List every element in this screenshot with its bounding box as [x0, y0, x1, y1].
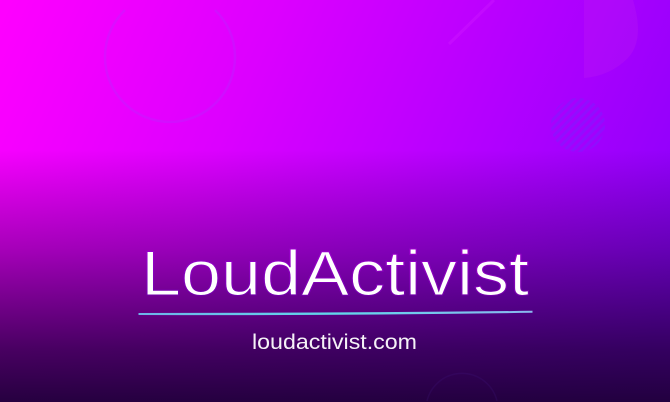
decorative faint ring at bottom	[427, 373, 497, 401]
underline	[138, 311, 532, 315]
decorative ring	[105, 10, 235, 122]
domain text: loudactivist.com	[252, 330, 417, 354]
decorative diagonal stroke	[449, 0, 494, 44]
decorative hatched circle	[551, 98, 605, 152]
dark bottom fade	[0, 150, 670, 402]
title: LoudActivist	[141, 239, 530, 309]
decorative half circle	[584, 0, 638, 78]
